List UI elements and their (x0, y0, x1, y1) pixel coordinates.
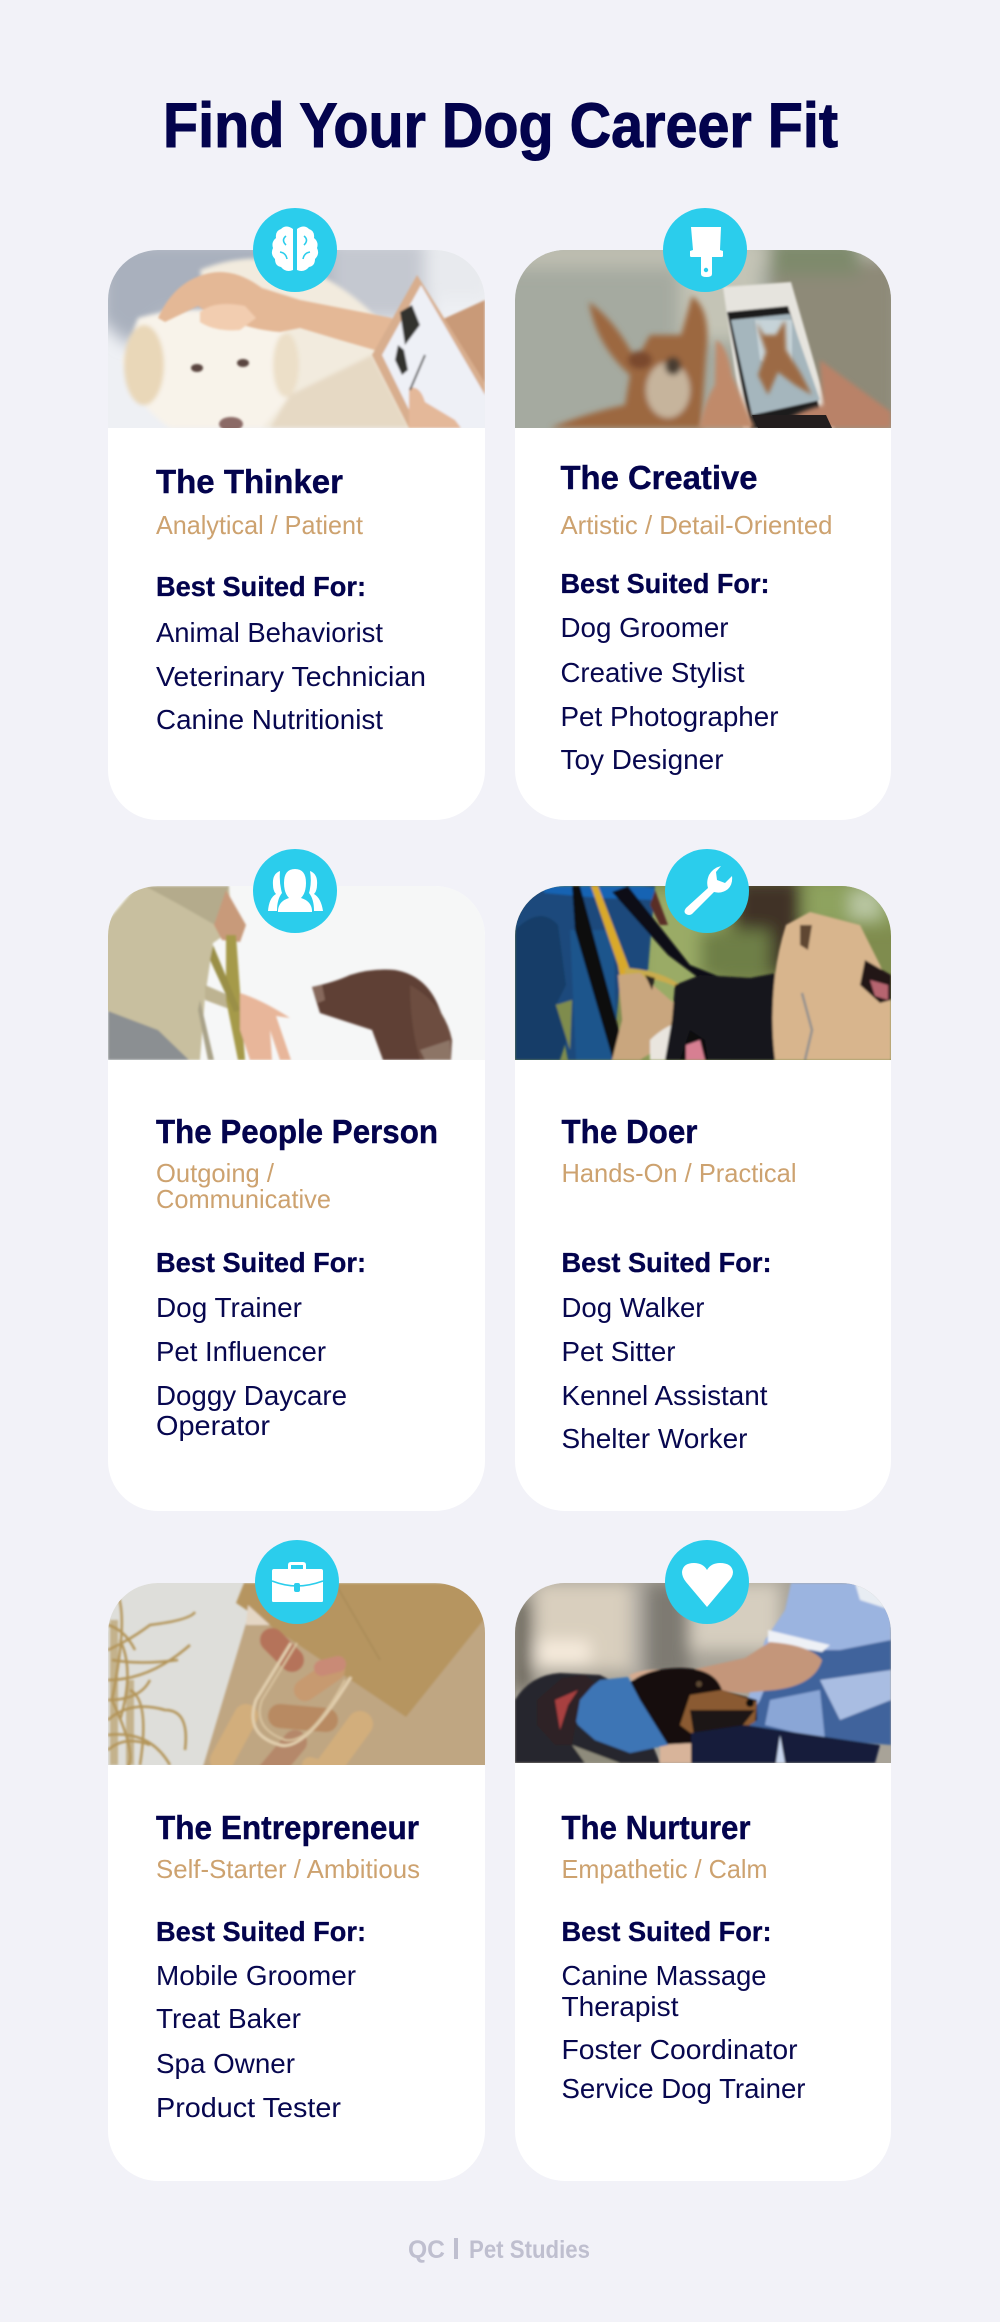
career list: Product Tester (156, 2092, 341, 2123)
card background (108, 886, 485, 1511)
panel: The Nurturer (515, 1540, 891, 2181)
photo: person petting service dog (515, 1583, 891, 1763)
career list (156, 1292, 347, 1441)
subheading: Best Suited For: (562, 1247, 772, 1278)
career list: Animal Behaviorist (156, 617, 383, 648)
career list (562, 1292, 768, 1454)
subheading: Best Suited For: (156, 571, 366, 602)
career list: Canine Nutritionist (156, 704, 383, 735)
traits: Self-Starter / Ambitious (156, 1854, 420, 1884)
footer logo: QC Pet Studies (408, 2236, 590, 2264)
heading: The Nurturer (562, 1809, 751, 1846)
career list: Pet Influencer (156, 1336, 326, 1367)
career list: Treat Baker (156, 2003, 301, 2034)
footer logo: QC Pet Studies: QC (408, 2236, 445, 2264)
icon: heart (665, 1540, 749, 1624)
subheading: Best Suited For: (560, 568, 770, 599)
traits: Outgoing / (156, 1158, 275, 1188)
career list: Dog Groomer (560, 612, 728, 643)
panel: The Entrepreneur (108, 1540, 490, 2181)
heading: The Thinker (156, 463, 343, 500)
card background (108, 1583, 485, 2181)
career list: Doggy Daycare (156, 1380, 347, 1411)
traits: Artistic / Detail-Oriented (560, 510, 832, 540)
career list: Kennel Assistant (562, 1380, 768, 1411)
traits: Communicative (156, 1184, 331, 1214)
heading: The People Person (156, 1113, 438, 1150)
career list: Mobile Groomer (156, 1960, 356, 1991)
icon: group of people (253, 849, 337, 933)
career list (562, 1960, 806, 2104)
traits: Analytical / Patient (156, 510, 364, 540)
photo: vet with white poodle (100, 240, 490, 431)
career list: Pet Photographer (560, 701, 778, 732)
career list (156, 617, 426, 735)
heading: The Doer (562, 1113, 698, 1150)
card background (515, 886, 891, 1511)
photo: phone photographing a dog (515, 250, 891, 428)
heading: The Creative (560, 459, 758, 496)
career list: Operator (156, 1410, 270, 1441)
career list: Canine Massage (562, 1960, 766, 1991)
traits (156, 1158, 331, 1214)
footer logo: QC Pet Studies: Pet Studies (469, 2236, 590, 2264)
icon: brain (253, 208, 337, 292)
career list: Spa Owner (156, 2048, 295, 2079)
subheading: Best Suited For: (156, 1916, 366, 1947)
traits: Empathetic / Calm (562, 1854, 768, 1884)
card background (108, 250, 485, 820)
panel: The Creative (505, 208, 900, 820)
heading: The Entrepreneur (156, 1809, 419, 1846)
career list: Dog Trainer (156, 1292, 302, 1323)
title: Find Your Dog Career Fit (163, 91, 838, 161)
career list (156, 1960, 356, 2123)
career list (560, 612, 778, 775)
photo: paper bag with dog biscuits (108, 1583, 490, 1772)
career list: Therapist (562, 1991, 679, 2022)
photo: dog walker with three dogs (515, 880, 895, 1060)
panel: The Doer (515, 849, 895, 1511)
photo: person offering hand to brown dog (100, 886, 485, 1060)
card background (515, 1583, 891, 2181)
career list: Veterinary Technician (156, 661, 426, 692)
panel: The People Person (100, 849, 485, 1511)
career list: Dog Walker (562, 1292, 704, 1323)
career list: Toy Designer (560, 744, 724, 775)
career list: Service Dog Trainer (562, 2073, 806, 2104)
icon: wrench (665, 849, 749, 933)
career list: Pet Sitter (562, 1336, 676, 1367)
subheading: Best Suited For: (562, 1916, 772, 1947)
panel: The Thinker (100, 208, 490, 820)
career list: Shelter Worker (562, 1423, 748, 1454)
card background (515, 250, 891, 820)
career list: Creative Stylist (560, 657, 745, 688)
icon: briefcase (255, 1540, 339, 1624)
subheading: Best Suited For: (156, 1247, 366, 1278)
career list: Foster Coordinator (562, 2034, 798, 2065)
icon: paintbrush (663, 208, 747, 292)
traits: Hands-On / Practical (562, 1158, 796, 1188)
